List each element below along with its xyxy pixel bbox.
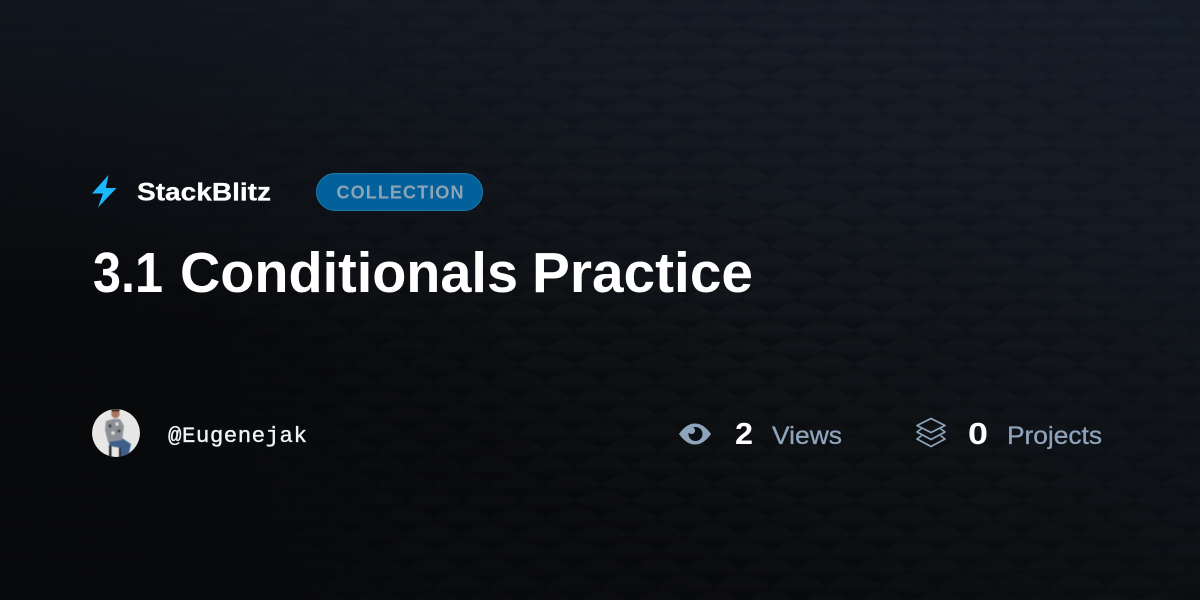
- badge: collection: [316, 174, 482, 210]
- projects stat: [917, 416, 1102, 451]
- icon: layers: [917, 418, 945, 446]
- views stat: [679, 416, 842, 451]
- title: Practice: [532, 241, 753, 305]
- title: 3.1: [93, 241, 163, 305]
- title: Conditionals: [180, 241, 518, 305]
- icon: StackBlitz bolt: [92, 175, 116, 208]
- brand name: StackBlitz: [137, 178, 271, 206]
- title: [93, 241, 753, 305]
- views stat: Views: [772, 422, 842, 450]
- projects stat: 0: [968, 416, 988, 451]
- badge: collection: COLLECTION: [336, 182, 464, 202]
- author avatar: [92, 409, 140, 458]
- author handle: @Eugenejak: [168, 423, 307, 449]
- icon: eye: [679, 424, 711, 444]
- views stat: 2: [735, 416, 753, 451]
- projects stat: Projects: [1007, 422, 1102, 450]
